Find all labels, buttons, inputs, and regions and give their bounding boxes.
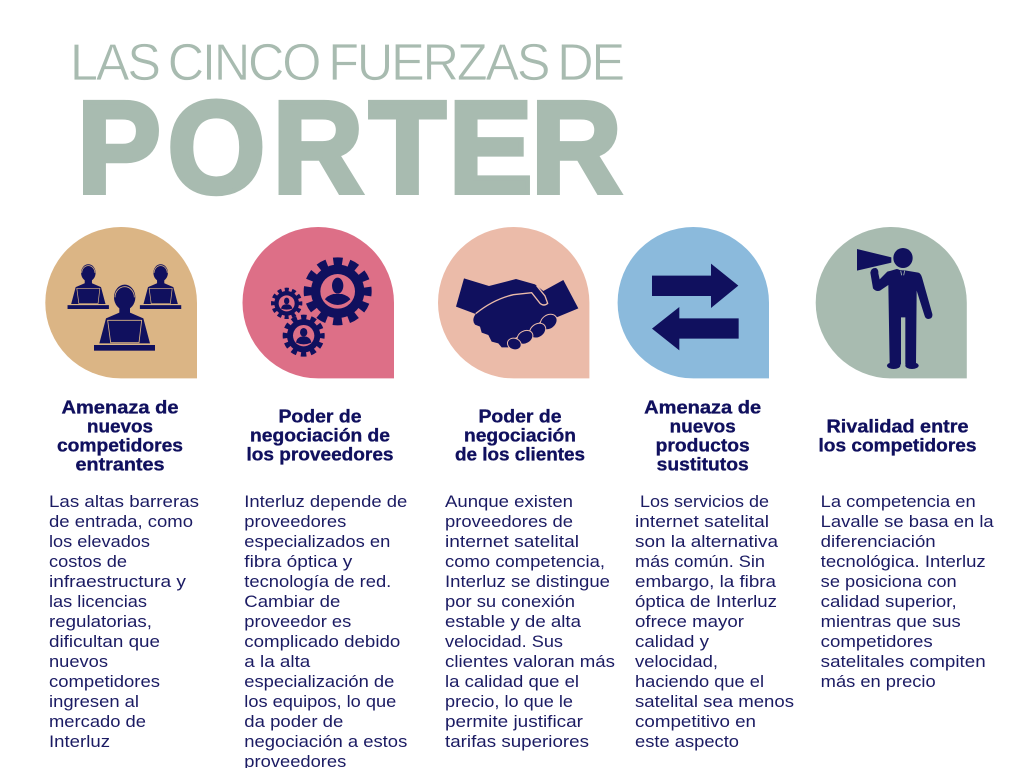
text block: velocidad. Sus (445, 632, 563, 651)
text block: Interluz depende de (244, 492, 407, 511)
text block: nuevos (49, 652, 108, 671)
text block: Las altas barreras (49, 492, 199, 511)
panel: poder de negociacion de los proveedores (243, 227, 407, 768)
heading (818, 416, 976, 456)
text block: óptica de Interluz (635, 592, 777, 611)
heading: nuevos (670, 416, 736, 436)
text block: estable y de alta (445, 612, 582, 631)
text block: son la alternativa (635, 532, 779, 551)
text block: precio, lo que le (445, 692, 573, 711)
heading: Amenaza de (644, 396, 761, 418)
panel: amenaza de nuevos productos sustitutos (618, 227, 794, 751)
heading: nuevos (87, 416, 153, 436)
text block: Lavalle se basa en la (821, 512, 994, 531)
heading: entrantes (76, 454, 164, 474)
text block: tecnológica. Interluz (821, 552, 986, 571)
icon: exchange arrows (618, 227, 769, 378)
text block: tecnología de red. (244, 572, 391, 591)
text block: satelitales compiten (821, 652, 986, 671)
text block: se posiciona con (821, 572, 957, 591)
text block: a la alta (244, 652, 311, 671)
text block: satelital sea menos (635, 692, 794, 711)
text block: especialización de (244, 672, 394, 691)
text block: la calidad que el (445, 672, 579, 691)
heading: competidores (57, 434, 183, 456)
heading: Poder de (278, 406, 362, 426)
heading: negociación de (250, 424, 390, 446)
text block: como competencia, (445, 552, 605, 571)
heading: sustitutos (657, 454, 749, 474)
icon: handshake (438, 227, 589, 378)
text block: infraestructura y (49, 572, 187, 591)
text block: calidad superior, (821, 592, 957, 611)
heading: los competidores (818, 434, 976, 456)
text block: mercado de (49, 712, 146, 731)
text block (49, 492, 199, 751)
title (70, 34, 623, 221)
text block: de entrada, como (49, 512, 193, 531)
heading: Poder de (478, 406, 562, 426)
title line: las cinco fuerzas de: LAS CINCO FUERZAS DE (70, 34, 623, 92)
panel: rivalidad entre los competidores (816, 227, 994, 691)
text block: tarifas superiores (445, 732, 589, 751)
icon: man with megaphone (816, 227, 967, 378)
text block: fibra óptica y (244, 552, 353, 571)
text block: los equipos, lo que (244, 692, 396, 711)
heading (644, 396, 761, 474)
text block: proveedor es (244, 612, 351, 631)
text block (821, 492, 994, 691)
text block: permite justificar (445, 712, 583, 731)
text block: internet satelital (635, 512, 769, 531)
text block: embargo, la fibra (635, 572, 777, 591)
text block: complicado debido (244, 632, 400, 651)
text block: La competencia en (821, 492, 976, 511)
heading (57, 396, 183, 474)
heading (246, 406, 394, 464)
text block: haciendo que el (635, 672, 764, 691)
text block (635, 492, 794, 751)
heading (455, 406, 585, 464)
icon: gears with people (243, 227, 394, 378)
text block: este aspecto (635, 732, 739, 751)
text block: más común. Sin (635, 552, 765, 571)
text block: competidores (49, 672, 160, 691)
heading: Rivalidad entre (826, 416, 968, 436)
text block: diferenciación (821, 532, 936, 551)
text block: Cambiar de (244, 592, 340, 611)
text block: Aunque existen (445, 492, 573, 511)
text block: proveedores (244, 512, 346, 531)
panel: poder de negociacion de los clientes (438, 227, 615, 751)
icon: people at laptops (45, 227, 197, 378)
text block: más en precio (821, 672, 936, 691)
text block: las licencias (49, 592, 147, 611)
text block: velocidad, (635, 652, 718, 671)
text block: Interluz (49, 732, 110, 751)
text block: da poder de (244, 712, 343, 731)
text block: dificultan que (49, 632, 160, 651)
heading: Amenaza de (62, 396, 178, 418)
text block: competitivo en (635, 712, 756, 731)
text block: clientes valoran más (445, 652, 615, 671)
text block: ingresen al (49, 692, 139, 711)
text block: los elevados (49, 532, 150, 551)
text block: mientras que sus (821, 612, 961, 631)
text block (445, 492, 615, 751)
text block: ofrece mayor (635, 612, 744, 631)
text block: calidad y (635, 632, 710, 651)
text block: especializados en (244, 532, 390, 551)
heading: los proveedores (246, 444, 394, 464)
text block: competidores (821, 632, 933, 651)
text block: regulatorias, (49, 612, 152, 631)
heading: de los clientes (455, 444, 585, 464)
text block: por su conexión (445, 592, 575, 611)
title word: porter: PORTER (77, 75, 622, 221)
heading: negociación (464, 424, 576, 446)
panel: amenaza de nuevos competidores (45, 227, 199, 751)
text block: Interluz se distingue (445, 572, 610, 591)
text block: Los servicios de (640, 492, 769, 511)
heading: productos (656, 434, 750, 456)
text block: proveedores de (445, 512, 573, 531)
text block (244, 492, 407, 768)
text block: negociación a estos (244, 732, 407, 751)
text block: internet satelital (445, 532, 579, 551)
text block: costos de (49, 552, 127, 571)
